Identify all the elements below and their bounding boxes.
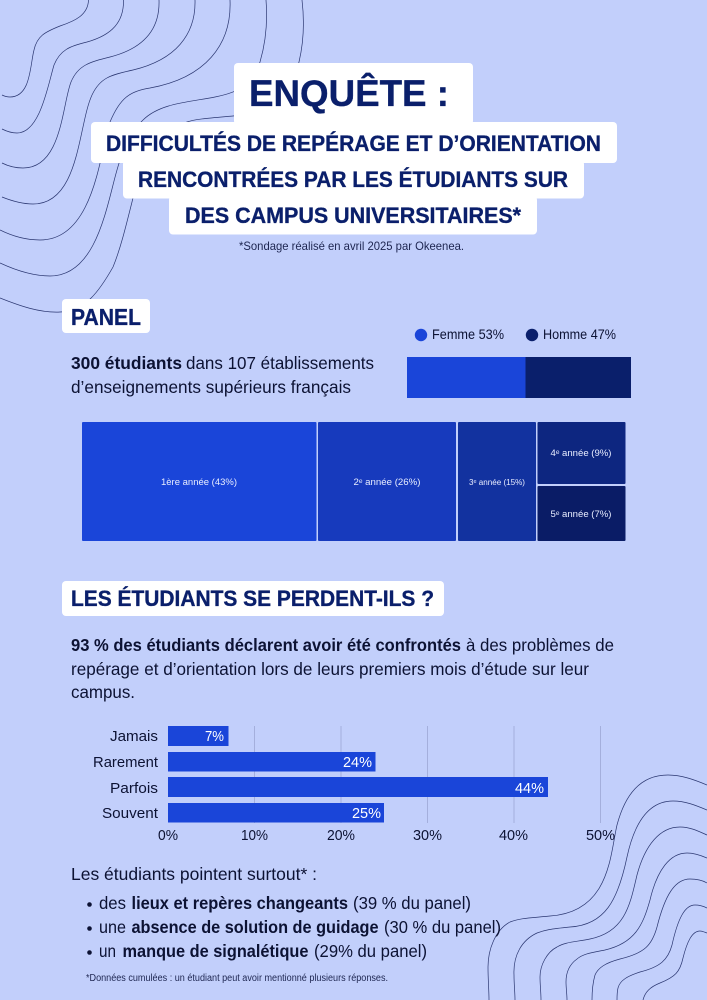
subtitle: RENCONTRÉES PAR LES ÉTUDIANTS SUR xyxy=(138,167,568,192)
bullet list: des xyxy=(99,893,126,913)
heading: les étudiants se perdent-ils: LES ÉTUDIANTS SE PERDENT-ILS ? xyxy=(71,586,434,611)
treemap: year of study: 2ᵉ année (26%) xyxy=(354,477,420,487)
bullet list: manque de signalétique xyxy=(122,941,309,961)
panel description: d’enseignements supérieurs français xyxy=(71,377,351,397)
bullet list: (39 % du panel) xyxy=(353,893,471,913)
bar chart: frequency: Souvent xyxy=(102,805,159,822)
bullet list: (29% du panel) xyxy=(314,941,427,961)
bar chart: frequency: Rarement xyxy=(93,754,159,771)
bar chart: frequency: 20% xyxy=(327,827,355,844)
bullet list: lieux et repères changeants xyxy=(132,893,348,913)
subtitle: DIFFICULTÉS DE REPÉRAGE ET D’ORIENTATION xyxy=(106,131,601,156)
panel description xyxy=(71,353,374,397)
bar chart: frequency: 30% xyxy=(413,827,442,844)
paragraph: 93 %: campus. xyxy=(71,682,135,702)
paragraph: 93 %: 93 % des étudiants déclarent avoir été confrontés xyxy=(71,635,461,655)
paragraph: 93 %: repérage et d’orientation lors de leurs premiers mois d’étude sur leur xyxy=(71,659,589,679)
panel description: 300 étudiants xyxy=(71,353,182,373)
treemap: year of study xyxy=(82,422,626,541)
legend: gender: Homme 47% xyxy=(543,327,616,342)
survey note: *Sondage réalisé en avril 2025 par Okeenea. xyxy=(239,239,464,253)
bar chart: frequency: 0% xyxy=(158,827,178,844)
bar chart: frequency: 40% xyxy=(499,827,528,844)
decorative contour lines: top left xyxy=(0,0,303,312)
subtitle: DES CAMPUS UNIVERSITAIRES* xyxy=(185,203,521,228)
footnote: *Données cumulées : un étudiant peut avoir mentionné plusieurs réponses. xyxy=(86,973,388,984)
bullet list: (30 % du panel) xyxy=(384,917,501,937)
text: lead-in: Les étudiants pointent surtout* : xyxy=(71,864,317,884)
paragraph: 93 % xyxy=(71,635,614,702)
decorative contour lines: bottom right xyxy=(488,775,707,1000)
legend: gender: Femme 53% xyxy=(432,327,504,342)
legend: gender xyxy=(415,327,616,342)
treemap: year of study: 1ère année (43%) xyxy=(161,477,237,487)
bar chart: frequency: 44% xyxy=(515,780,544,797)
bar chart: frequency: 50% xyxy=(586,827,615,844)
bullet list: un xyxy=(99,941,116,961)
bar chart: frequency: Jamais xyxy=(110,728,158,745)
treemap: year of study: 3ᵉ année (15%) xyxy=(469,478,525,487)
main title: ENQUÊTE : xyxy=(249,72,449,114)
bar chart: frequency xyxy=(93,726,615,844)
bar chart: frequency: 10% xyxy=(241,827,268,844)
bar chart: frequency: 25% xyxy=(352,805,381,822)
treemap: year of study: 5ᵉ année (7%) xyxy=(550,509,612,519)
heading: les étudiants se perdent-ils xyxy=(62,581,444,616)
treemap: year of study: 4ᵉ année (9%) xyxy=(550,448,612,458)
bar chart: frequency: 24% xyxy=(343,754,372,771)
heading: panel xyxy=(62,299,150,333)
stacked bar: gender xyxy=(407,357,631,398)
panel description: dans 107 établissements xyxy=(186,353,374,373)
subtitle xyxy=(106,131,601,228)
bullet list xyxy=(87,893,501,961)
bullet list: absence de solution de guidage xyxy=(132,917,379,937)
bar chart: frequency: Parfois xyxy=(110,780,158,797)
bullet list: une xyxy=(99,917,126,937)
bar chart: frequency: 7% xyxy=(205,728,224,745)
heading: panel: PANEL xyxy=(71,304,141,330)
title block xyxy=(91,63,617,234)
paragraph: 93 %: à des problèmes de xyxy=(466,635,614,655)
